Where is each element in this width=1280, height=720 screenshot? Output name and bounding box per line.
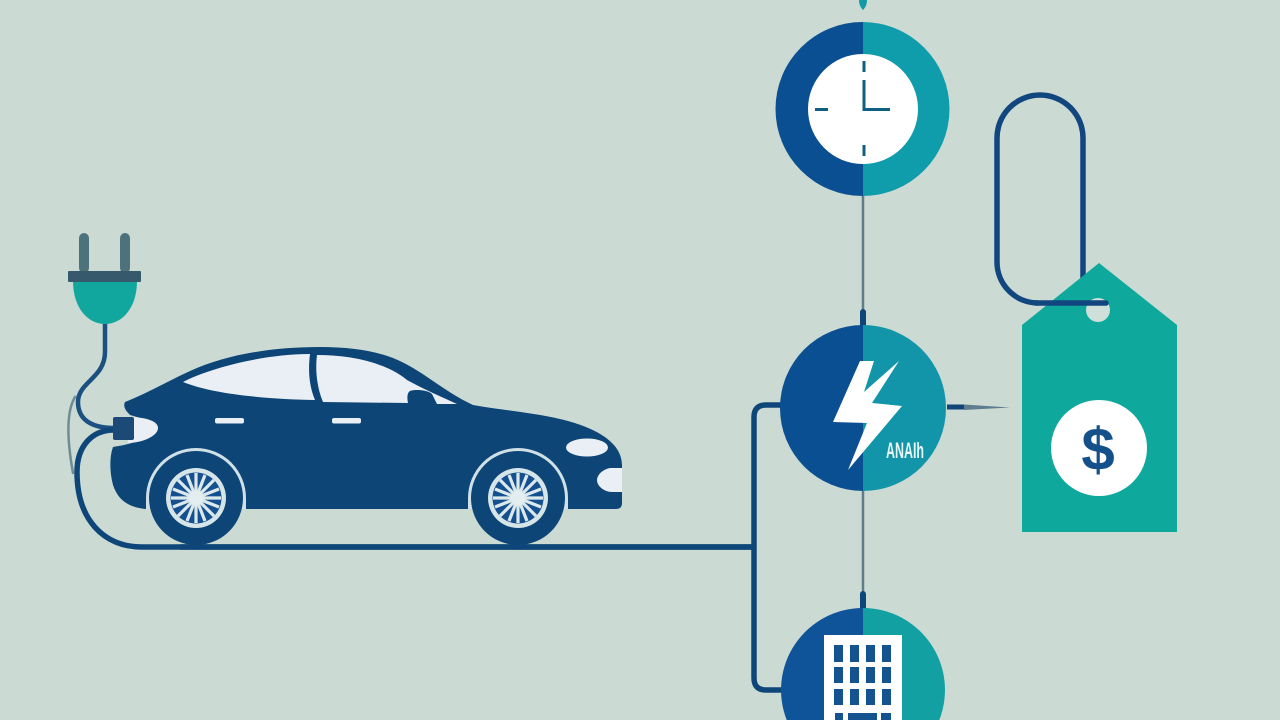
- clock hands and ticks: [815, 61, 890, 156]
- front bumper light: [597, 468, 622, 492]
- tag body: [1022, 263, 1177, 532]
- tag string back: [997, 95, 1083, 303]
- dollar badge: [1051, 400, 1147, 496]
- building circle: [781, 608, 945, 720]
- taillight: [128, 417, 158, 443]
- charge port connector: [113, 417, 134, 440]
- icon: lightning bolt: [833, 361, 902, 470]
- icon: electric car: [110, 347, 622, 545]
- small label: ANAIh: [886, 438, 924, 463]
- electricity circle: [780, 325, 946, 491]
- tag hole: [1086, 298, 1110, 322]
- rear side window: [183, 354, 315, 400]
- front wheel: [468, 448, 568, 545]
- headlight: [566, 438, 608, 456]
- car body: [110, 347, 622, 509]
- arrow to price tag: [947, 404, 1010, 410]
- clock circle: [776, 22, 950, 196]
- rear door handle: [215, 418, 244, 424]
- vertical connectors: [754, 190, 863, 690]
- icon: plug: [68, 233, 141, 324]
- icon: office building: [824, 635, 902, 720]
- tag string front: [1036, 300, 1106, 306]
- ground line over wheels: [180, 544, 752, 550]
- front door handle: [332, 418, 361, 424]
- price tag: [997, 95, 1177, 532]
- dollar sign: $: [1081, 416, 1115, 483]
- top drop connector: [859, 0, 867, 10]
- front side window: [316, 355, 457, 404]
- rear wheel: [146, 448, 246, 545]
- clock face: [808, 54, 918, 164]
- plug cable and ground line: [68, 322, 752, 547]
